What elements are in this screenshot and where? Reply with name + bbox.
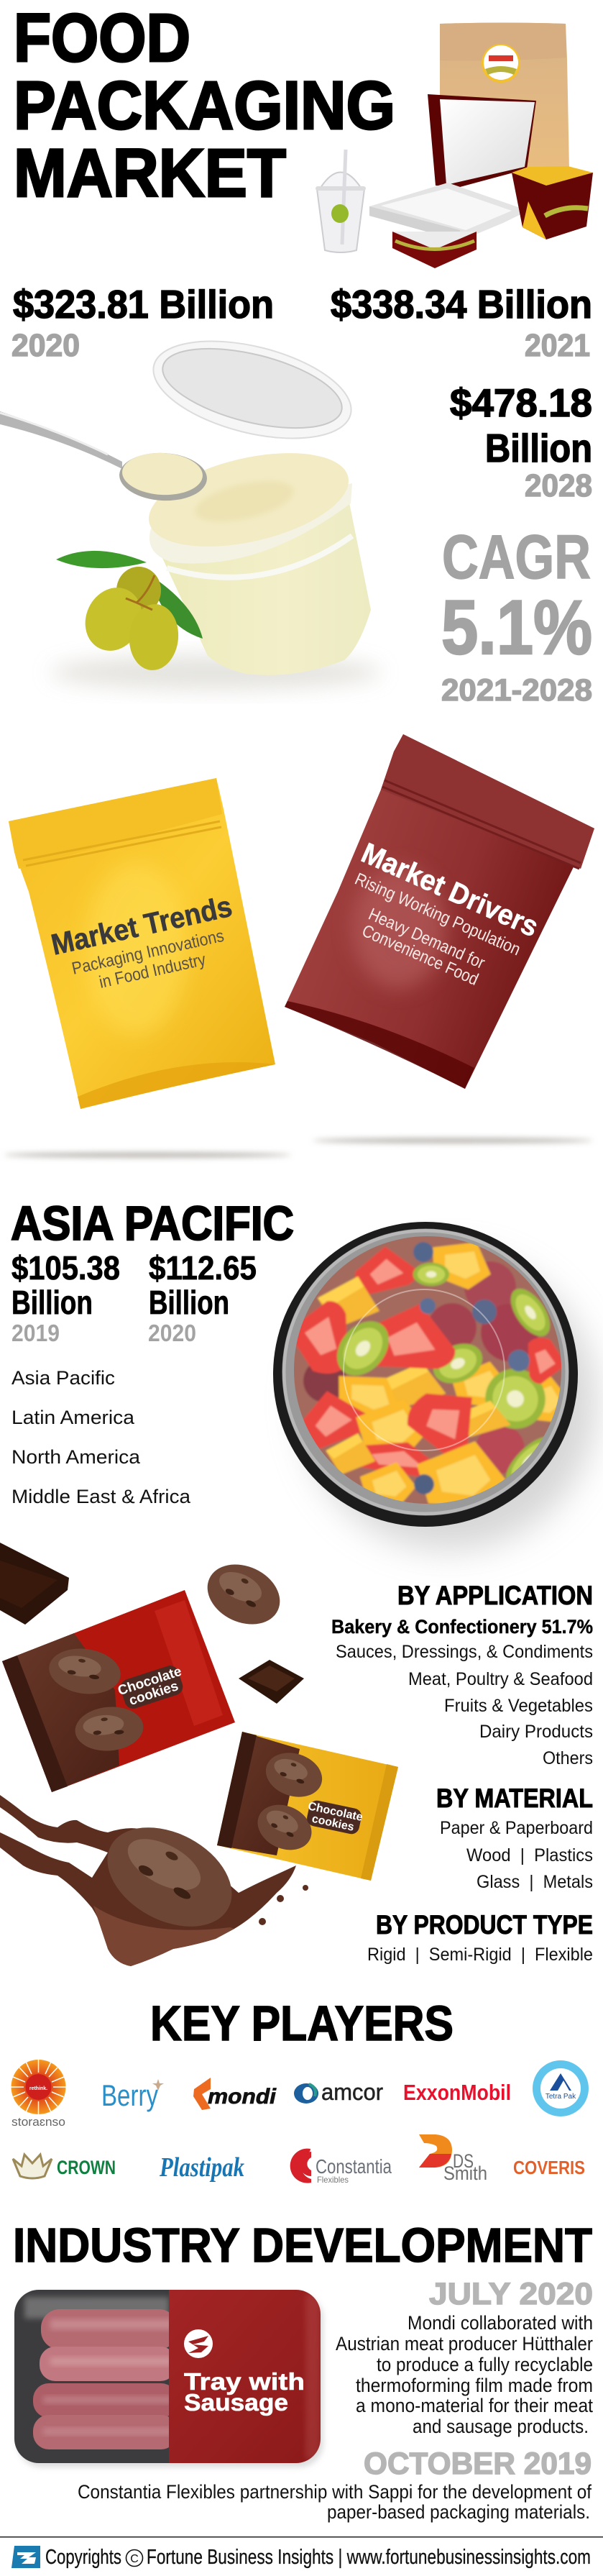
title: FOOD <box>14 0 190 76</box>
label <box>116 1663 188 1712</box>
section: by application: Others <box>543 1748 593 1768</box>
illustration: fast food packaging set <box>316 23 593 268</box>
label: Chocolate <box>116 1664 183 1699</box>
icon: olives and leaves <box>56 551 203 672</box>
logo: Constantia Flexibles <box>290 2149 392 2185</box>
text block: Rising Working Population <box>352 869 523 959</box>
icon: copyright: C <box>130 2553 139 2565</box>
logo: Stora Enso: storaɛnso <box>11 2115 65 2129</box>
logo: Constantia Flexibles: Constantia <box>316 2155 392 2178</box>
panel: market trends pouch <box>9 778 275 1109</box>
label: Tray with <box>184 2368 305 2395</box>
CAGR <box>441 523 592 708</box>
market size 2028: $478.18 <box>450 380 592 425</box>
stat: Asia Pacific 2019: Billion <box>11 1284 93 1321</box>
list: regions <box>11 1367 191 1507</box>
label: Sausage <box>184 2389 288 2416</box>
label: cookies <box>127 1678 180 1709</box>
stat: Asia Pacific 2019: $105.38 <box>11 1249 120 1287</box>
market size 2021: 2021 <box>525 328 590 363</box>
section: by application: Fruits & Vegetables <box>444 1696 593 1716</box>
icon: brand mark <box>184 2329 213 2358</box>
list: regions: North America <box>11 1446 141 1468</box>
footer: Copyrights <box>45 2546 121 2569</box>
stat: Asia Pacific 2020 <box>148 1249 257 1346</box>
panel: red cookie packet <box>2 1590 235 1792</box>
icon: noodle box <box>512 166 593 239</box>
illustration: fruit salad bowl <box>273 1222 597 1550</box>
section: by product type: Rigid | Semi-Rigid | Flexible <box>367 1945 593 1965</box>
label <box>184 2368 305 2416</box>
icon: lid <box>144 324 361 456</box>
label: Chocolate <box>307 1800 364 1824</box>
stat: Asia Pacific 2020: 2020 <box>148 1320 196 1346</box>
illustration: sausage tray <box>14 2290 323 2467</box>
logo: Tetra Pak <box>533 2060 589 2116</box>
heading: Market Drivers <box>356 837 543 944</box>
text block: in Food Industry <box>97 950 208 992</box>
icon: tub <box>140 437 371 675</box>
section: by product type <box>367 1910 593 1965</box>
section: by material <box>436 1783 593 1892</box>
heading: Market Trends <box>48 890 235 962</box>
logo: Berry: Berry <box>101 2078 158 2112</box>
market size 2021: $338.34 Billion <box>331 282 592 326</box>
section: by material: Glass | Metals <box>477 1872 593 1892</box>
market size 2021 <box>331 282 592 363</box>
logo: DS Smith: DS <box>453 2150 474 2172</box>
section: by material: Wood | Plastics <box>466 1845 593 1865</box>
label <box>304 1799 364 1836</box>
CAGR: 2021-2028 <box>441 673 592 708</box>
stat: Asia Pacific 2020: Billion <box>149 1284 229 1321</box>
panel: yellow cookie packet <box>217 1732 398 1881</box>
logo: ExxonMobil: ExxonMobil <box>403 2080 511 2105</box>
market size 2020: 2020 <box>11 328 80 363</box>
list: regions: Asia Pacific <box>11 1367 115 1389</box>
title <box>14 0 395 211</box>
icon: plastic cup <box>316 150 366 252</box>
section: by application <box>331 1581 593 1768</box>
illustration: chocolate cookies <box>0 1543 398 1966</box>
section: by application: Meat, Poultry & Seafood <box>408 1669 593 1689</box>
icon: Fortune Business Insights logo <box>11 2546 40 2568</box>
market size 2028: Billion <box>485 426 592 470</box>
list: regions: Latin America <box>11 1407 135 1428</box>
logo: Constantia Flexibles: Flexibles <box>317 2175 349 2185</box>
icon: wedge box <box>392 232 477 268</box>
icon: chocolate splash with cookie <box>0 1795 308 1966</box>
pouch shadows <box>4 1138 593 1158</box>
section: by application: Sauces, Dressings, & Condiments <box>336 1642 593 1662</box>
icon: small chocolate <box>239 1660 304 1704</box>
logo: DS Smith: Smith <box>443 2162 487 2184</box>
heading: key players: KEY PLAYERS <box>150 1996 454 2051</box>
text block: Packaging Innovations <box>70 926 226 979</box>
logo: Stora Enso <box>11 2060 66 2129</box>
text block: Convenience Food <box>359 921 482 990</box>
icon: paper bag <box>440 23 569 170</box>
market size 2028: 2028 <box>525 468 592 503</box>
logo: Stora Enso: rethink. <box>29 2086 47 2091</box>
development: October 2019 <box>78 2447 592 2523</box>
logo: DS Smith <box>419 2134 487 2184</box>
text block: Heavy Demand for <box>366 905 488 973</box>
development: July 2020: JULY 2020 <box>429 2277 593 2311</box>
icon: pizza box <box>369 94 536 241</box>
logo: Crown: CROWN <box>57 2157 116 2178</box>
logo: Tetra Pak: Tetra Pak <box>546 2093 576 2101</box>
section: by material: Paper & Paperboard <box>440 1818 593 1838</box>
stat: Asia Pacific 2019: 2019 <box>11 1320 60 1346</box>
development: October 2019: OCTOBER 2019 <box>364 2447 592 2481</box>
logo: Amcor <box>294 2079 383 2105</box>
logo: Plastipak: Plastipak <box>159 2152 244 2183</box>
icon: spoon <box>0 411 208 503</box>
label: cookies <box>310 1813 355 1834</box>
logo: Mondi: mondi <box>208 2085 277 2109</box>
icon: cookie <box>198 1553 290 1635</box>
logo: Mondi <box>193 2078 277 2110</box>
heading: Asia Pacific: ASIA PACIFIC <box>11 1197 294 1251</box>
logo: Amcor: amcor <box>321 2079 383 2105</box>
icon: chocolate block <box>0 1543 69 1625</box>
title: MARKET <box>14 135 286 211</box>
logo: Crown <box>13 2155 116 2178</box>
text block <box>70 926 226 992</box>
icon: sausages <box>33 2309 178 2449</box>
market size 2028 <box>450 380 592 503</box>
stat: Asia Pacific 2020: $112.65 <box>149 1249 257 1287</box>
development: July 2020 <box>336 2277 593 2437</box>
illustration: yogurt tub with spoon and olives <box>0 324 381 690</box>
icon: copyright <box>126 2550 142 2566</box>
section: by application: Dairy Products <box>479 1722 593 1742</box>
list: regions: Middle East & Africa <box>11 1486 191 1507</box>
market size 2020: $323.81 Billion <box>13 282 274 326</box>
title: PACKAGING <box>14 68 395 144</box>
market size 2020 <box>11 282 274 363</box>
stat: Asia Pacific 2019 <box>11 1249 120 1346</box>
logo: Coveris: COVERIS <box>513 2157 585 2178</box>
panel: market drivers pouch <box>285 734 594 1089</box>
